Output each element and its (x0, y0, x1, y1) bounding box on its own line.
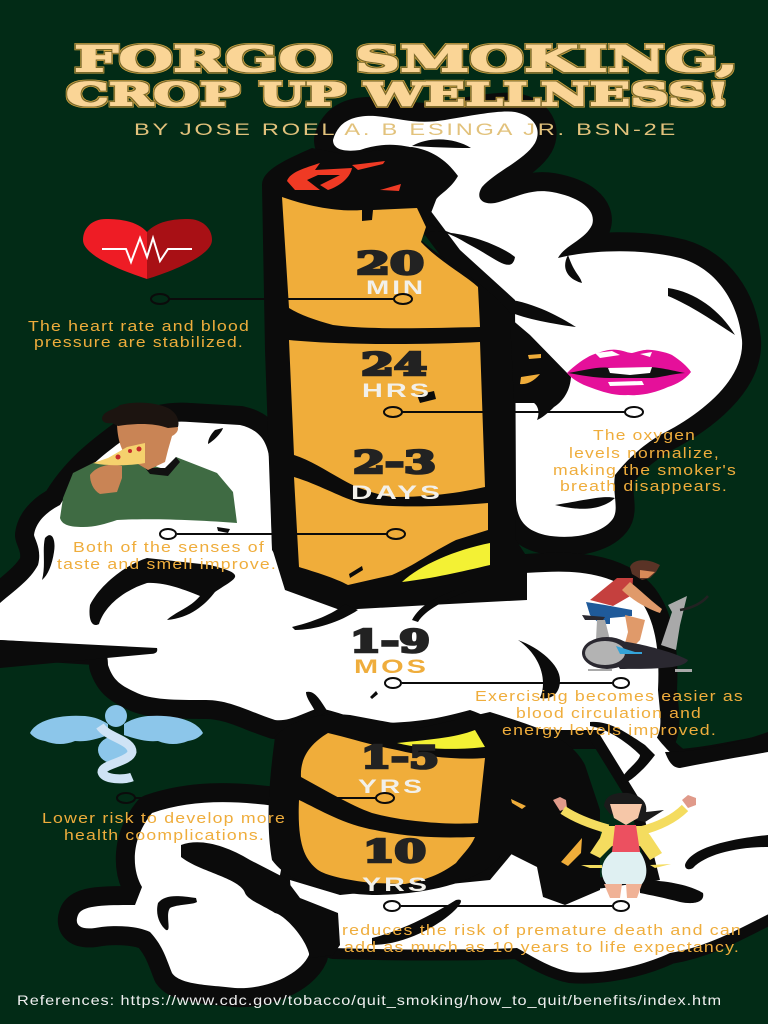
smoke black detail strokes (0, 139, 768, 958)
illustration: jumping woman (553, 793, 696, 898)
text: senses (57, 540, 277, 573)
label: 10 yrs: YRS (362, 875, 430, 896)
label: 20 min: MIN (366, 278, 426, 299)
text: senses: Both of the senses of (73, 540, 265, 556)
icon: caduceus (30, 705, 203, 779)
text: lower risk: health coomplications. (64, 828, 265, 844)
text: lower risk: Lower risk to develop more (42, 811, 286, 827)
filter yellow band lower (397, 730, 485, 749)
label: 20 min (356, 246, 426, 299)
connector lines (117, 294, 643, 911)
label: 10 yrs: 10 (363, 834, 426, 870)
cigarette lower black body (269, 712, 600, 905)
text: oxygen: The oxygen (593, 428, 696, 444)
title (66, 39, 738, 113)
text: premature death (342, 923, 742, 956)
text: lower risk (42, 811, 286, 844)
text: oxygen: making the smoker's (553, 463, 737, 479)
subtitle: BY JOSE ROEL A. B ESINGA JR. BSN-2E (134, 120, 678, 139)
text: premature death: add as much as 10 years to life expectancy. (344, 940, 740, 956)
illustration: man eating pizza (60, 403, 237, 527)
text: oxygen: breath disappears. (560, 479, 728, 495)
ember (287, 161, 401, 191)
label: 1-9 mos: 1-9 (350, 624, 430, 660)
text: oxygen: levels normalize, (569, 446, 720, 462)
text: senses: taste and smell improve. (57, 557, 277, 573)
orange segment 4 (301, 733, 485, 824)
text: heart rate (28, 319, 250, 351)
confetti marks (511, 354, 582, 866)
label: 24 hrs: 24 (361, 347, 427, 383)
illustration: man on exercise bike (582, 560, 708, 672)
title: FORGO SMOKING, (74, 39, 738, 80)
label: 24 hrs: HRS (362, 381, 432, 402)
title: CROP UP WELLNESS! (66, 77, 730, 113)
text: oxygen (553, 428, 737, 495)
label: 1-9 mos: MOS (354, 657, 429, 678)
label: 1-5 yrs: 1-5 (361, 740, 439, 776)
label: 24 hrs (361, 347, 432, 402)
text: exercising: energy levels improved. (502, 723, 717, 739)
label: 1-5 yrs: YRS (358, 777, 425, 798)
label: 1-5 yrs (358, 740, 439, 798)
references: References: https://www.cdc.gov/tobacco/quit_smoking/how_to_quit/benefits/index.htm (17, 992, 722, 1008)
orange segment 1 (282, 197, 480, 328)
cigarette upper black body (262, 147, 527, 610)
label: 10 yrs (362, 834, 430, 896)
icon: heart (83, 219, 212, 279)
text: exercising: blood circulation and (516, 706, 702, 722)
label: 2-3 days: 2-3 (353, 445, 436, 481)
text: exercising (475, 689, 744, 739)
text: heart rate: The heart rate and blood (28, 319, 250, 335)
label: 20 min: 20 (356, 246, 424, 282)
label: 1-9 mos (350, 624, 430, 678)
orange segment 5 (299, 800, 475, 884)
label: 2-3 days: DAYS (351, 483, 443, 504)
orange segment 2 (289, 340, 485, 497)
icon: lips (567, 350, 691, 395)
filter yellow band (402, 543, 490, 582)
text: premature death: reduces the risk of premature death and can (342, 923, 742, 939)
text: exercising: Exercising becomes easier as (475, 689, 744, 705)
label: 2-3 days (351, 445, 443, 504)
black wedge beside the lips (510, 318, 571, 420)
text: heart rate: pressure are stabilized. (34, 335, 244, 351)
orange segment 3 (294, 477, 488, 585)
